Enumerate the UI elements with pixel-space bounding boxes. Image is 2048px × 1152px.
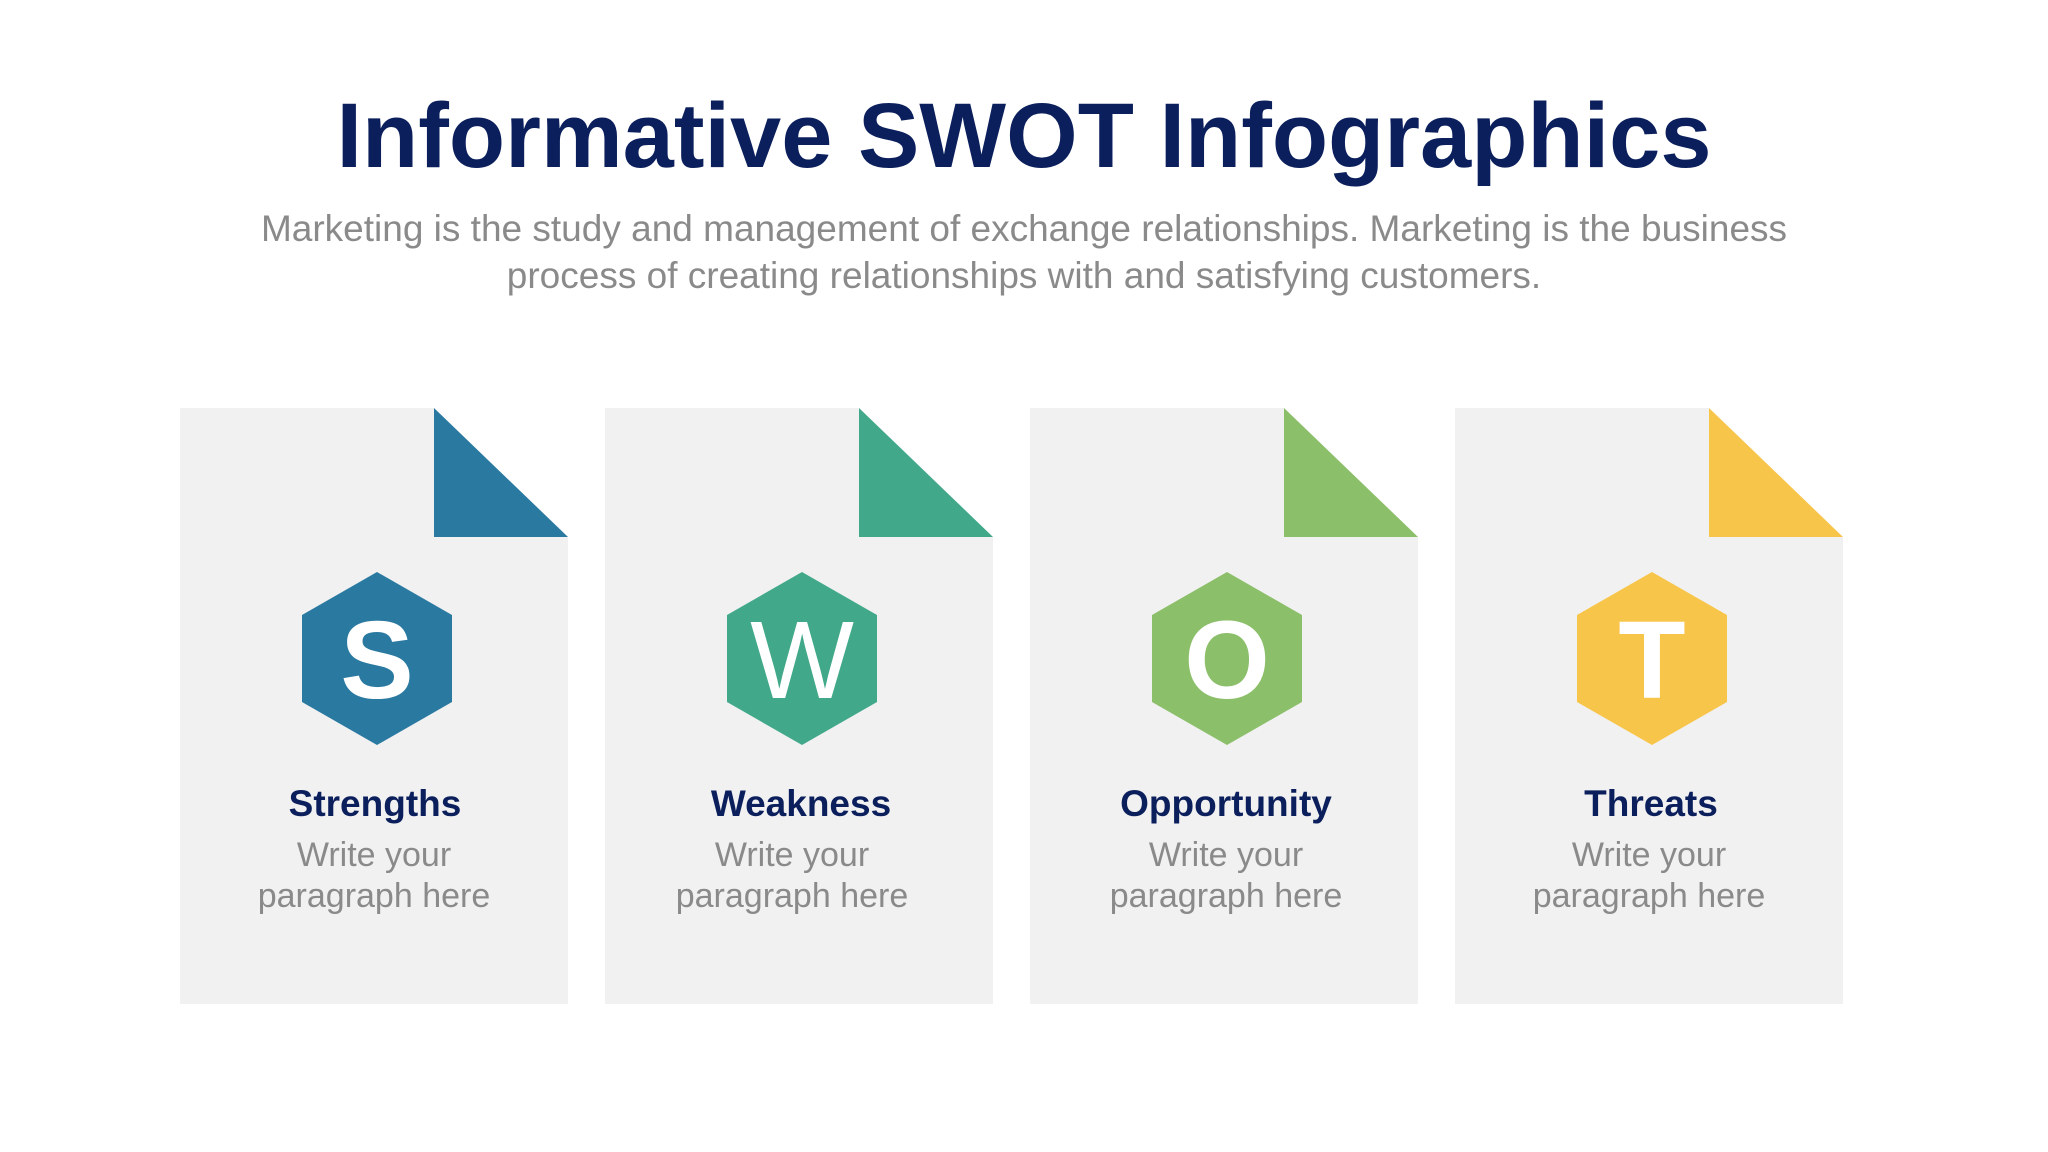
panel: weakness: W (750, 599, 854, 722)
text: strengths: paragraph here (258, 877, 490, 915)
text: threats: Write your (1572, 836, 1726, 874)
text: weakness: paragraph here (676, 877, 908, 915)
text: opportunity: paragraph here (1110, 877, 1342, 915)
text: weakness (676, 836, 908, 915)
panel: opportunity (1030, 408, 1418, 1004)
heading: strengths: Strengths (289, 783, 461, 824)
heading: weakness: Weakness (711, 783, 891, 824)
text: opportunity: Write your (1149, 836, 1303, 874)
subtitle (261, 208, 1787, 296)
heading: threats: Threats (1584, 783, 1718, 824)
text: strengths (258, 836, 490, 915)
text: threats: paragraph here (1533, 877, 1765, 915)
title: Informative SWOT Infographics (336, 85, 1712, 187)
text: opportunity (1110, 836, 1342, 915)
text: strengths: Write your (297, 836, 451, 874)
heading: opportunity: Opportunity (1120, 783, 1332, 824)
panel: strengths (180, 408, 568, 1004)
panel: opportunity: O (1184, 599, 1270, 722)
panel: strengths: S (340, 599, 414, 722)
text: threats (1533, 836, 1765, 915)
subtitle: process of creating relationships with and satisfying customers. (507, 255, 1541, 296)
panel: weakness (605, 408, 993, 1004)
panel: threats (1455, 408, 1843, 1004)
panel: threats: T (1618, 599, 1686, 722)
subtitle: Marketing is the study and management of exchange relationships. Marketing is the business (261, 208, 1787, 249)
text: weakness: Write your (715, 836, 869, 874)
